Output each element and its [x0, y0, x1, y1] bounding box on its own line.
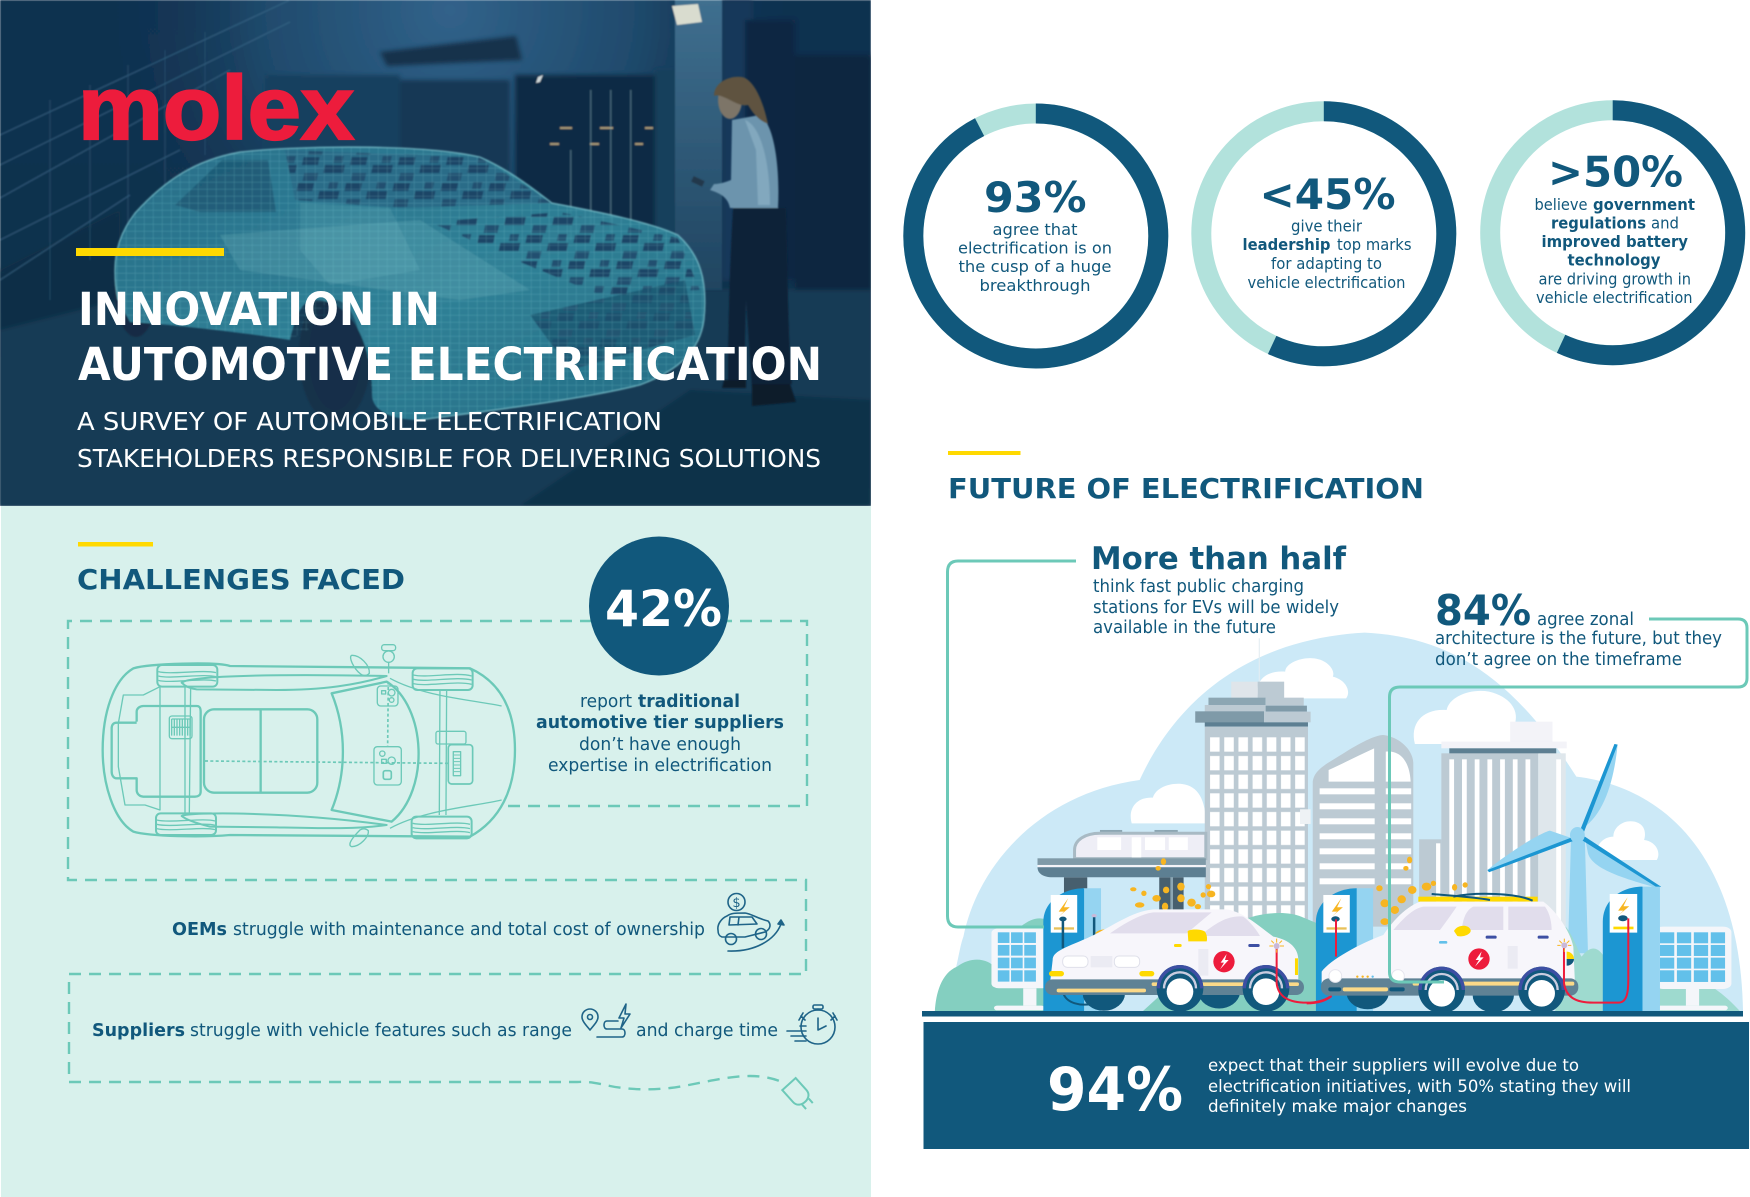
text: 94% description: expect that their suppliers will evolve due to: [1208, 1056, 1579, 1076]
title: [78, 283, 822, 391]
text: 42% description: report: [580, 691, 632, 712]
text: more than half: [1091, 541, 1346, 638]
stat: 94%: 94%: [1047, 1055, 1183, 1125]
text: 42% description: expertise in electrification: [548, 755, 772, 776]
icon: plug: [782, 1078, 816, 1112]
stat: <45%: <45%: [1260, 170, 1396, 219]
building striped: [1419, 722, 1567, 927]
title: AUTOMOTIVE ELECTRIFICATION: [78, 338, 822, 391]
text: 45% description: vehicle electrification: [1248, 273, 1406, 292]
car: white sedan: [1045, 909, 1330, 1012]
text: 93% description: breakthrough: [980, 276, 1090, 295]
text: suppliers: struggle with vehicle features such as range: [190, 1020, 572, 1041]
text: 50% description: regulations: [1551, 214, 1646, 232]
text: 84% zonal: don’t agree on the timeframe: [1435, 649, 1682, 670]
text: suppliers: [92, 1020, 778, 1041]
heading: future of electrification: FUTURE OF ELECTRIFICATION: [948, 472, 1424, 505]
text: OEMs: struggle with maintenance and total cost of ownership: [233, 919, 705, 940]
hero person: [691, 77, 796, 406]
accent bar: hero: [76, 248, 224, 256]
stat circle: 42%: 42%: [605, 580, 722, 638]
text: 84% zonal: [1435, 586, 1722, 670]
hero panel: [0, 0, 871, 506]
donut: 45%: [1201, 111, 1446, 356]
text: 93% description: the cusp of a huge: [958, 257, 1112, 276]
text: 45% description: give their: [1291, 216, 1362, 236]
text: more than half: think fast public charging: [1093, 576, 1304, 597]
ev chargers: [1043, 887, 1660, 1012]
stat circle: 42%: [589, 536, 729, 676]
accent bar: challenges: [78, 542, 153, 546]
text: 50% description: vehicle electrification: [1536, 288, 1692, 307]
sky: [936, 633, 1743, 1012]
subtitle: A SURVEY OF AUTOMOBILE ELECTRIFICATION: [77, 407, 662, 436]
text: 42% description: [536, 691, 784, 776]
logo: molex: molex: [78, 59, 354, 159]
text: more than half: stations for EVs will be widely: [1093, 597, 1339, 618]
icon: car with dollar: $: [732, 896, 741, 911]
text: more than half: More than half: [1091, 541, 1346, 577]
text: 93% description: [958, 220, 1112, 295]
stat: 93%: 93%: [984, 173, 1086, 222]
text: 42% description: don’t have enough: [579, 734, 741, 755]
text: suppliers: Suppliers: [92, 1020, 185, 1041]
stat: >50%: >50%: [1548, 148, 1683, 196]
text: 93% description: agree that: [992, 220, 1078, 239]
text: 94% description: electrification initiatives, with 50% stating they will: [1208, 1077, 1631, 1097]
text: 93% description: electrification is on: [958, 238, 1112, 258]
building tall: [1195, 638, 1311, 927]
leaves: [1130, 857, 1468, 925]
clouds: [1131, 658, 1658, 860]
building curved: [1313, 735, 1413, 927]
text: 45% description: top marks: [1337, 235, 1412, 254]
text: 42% description: traditional: [638, 691, 740, 712]
title: INNOVATION IN: [78, 283, 440, 336]
text: 45% description: [1242, 216, 1412, 292]
banner: 94%: [924, 1022, 1749, 1149]
text: 50% description: improved battery: [1542, 232, 1689, 251]
car: white hatchback: [1307, 894, 1628, 1013]
text: 45% description: for adapting to: [1271, 254, 1382, 273]
text: 50% description: and: [1651, 214, 1679, 232]
green connector line: more than half: [948, 561, 1076, 927]
text: 45% description: leadership: [1242, 235, 1330, 254]
accent bar: future: [948, 451, 1020, 455]
hero background: showroom: [0, 0, 871, 506]
text: 42% description: automotive tier suppliers: [536, 712, 784, 733]
text: 84% zonal: 84%: [1435, 586, 1531, 635]
ground line: [922, 1011, 1743, 1016]
wind turbine: [1487, 744, 1661, 953]
elevated train: [1038, 830, 1206, 914]
hero car wireframe: [114, 147, 705, 423]
icon: stopwatch: [787, 1005, 837, 1044]
text: more than half: available in the future: [1093, 617, 1276, 638]
text: 50% description: government: [1593, 195, 1695, 214]
text: 50% description: are driving growth in: [1538, 270, 1691, 288]
text: 94% description: definitely make major changes: [1208, 1097, 1467, 1117]
text: 50% description: [1534, 195, 1695, 307]
city illustration: [935, 633, 1743, 1012]
dashed connector: car to right edge: [508, 805, 807, 807]
donut: 50%: [1490, 110, 1735, 355]
text: 84% zonal: agree zonal: [1537, 609, 1634, 630]
text: 50% description: technology: [1568, 250, 1661, 270]
panel: challenges faced: [1, 506, 871, 1197]
top-down car line drawing: [103, 645, 515, 847]
text: 94% description: [1208, 1056, 1631, 1117]
text: OEMs: OEMs: [172, 919, 227, 940]
green connector line: 84%: [1390, 619, 1747, 982]
bushes: [935, 913, 1740, 1012]
subtitle: [77, 407, 821, 473]
solar panels: [991, 927, 1731, 1010]
text: 50% description: believe: [1534, 195, 1588, 214]
donut: 93%: [913, 114, 1158, 358]
subtitle: STAKEHOLDERS RESPONSIBLE FOR DELIVERING SOLUTIONS: [77, 444, 821, 473]
icon: car with dollar: [718, 894, 784, 951]
dashed connector path: [68, 621, 807, 1089]
text: 84% zonal: architecture is the future, but they: [1435, 628, 1722, 649]
text: suppliers: and charge time: [636, 1020, 778, 1041]
icon: range: [582, 1004, 630, 1037]
heading: challenges faced: CHALLENGES FACED: [77, 563, 405, 596]
